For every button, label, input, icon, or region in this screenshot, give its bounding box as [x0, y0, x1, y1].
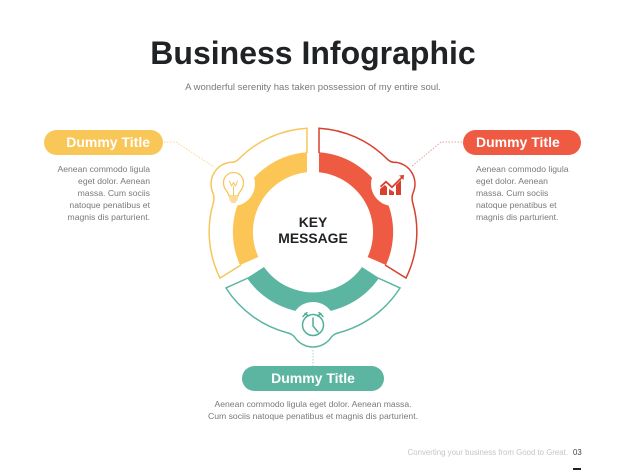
footer: Converting your business from Good to Great. — [408, 448, 568, 457]
yellow notch — [211, 162, 255, 206]
green notch — [291, 302, 335, 346]
footer: 03 — [573, 448, 582, 457]
panel: right callout — [463, 130, 581, 222]
connector: red — [411, 142, 462, 167]
footer — [408, 448, 582, 470]
title: Business Infographic — [150, 35, 476, 71]
right text block: eget dolor. Aenean — [476, 176, 548, 186]
yellow outline — [209, 128, 307, 278]
right text block: massa. Cum sociis — [476, 188, 548, 198]
bottom text block — [208, 399, 418, 421]
left pill heading: Dummy Title — [66, 134, 150, 150]
center message: KEY — [299, 214, 328, 230]
panel: red segment — [319, 128, 417, 278]
connector: green — [312, 347, 314, 366]
bottom text block: Aenean commodo ligula eget dolor. Aenean massa. — [214, 399, 412, 409]
left text block: Aenean commodo ligula — [57, 164, 150, 174]
yellow ring — [233, 152, 307, 265]
subtitle: A wonderful serenity has taken possession of my entire soul. — [185, 82, 441, 93]
bottom pill heading — [242, 366, 384, 391]
right text block: natoque penatibus et — [476, 200, 557, 210]
right text block — [476, 164, 569, 222]
left text block: natoque penatibus et — [69, 200, 151, 210]
green outline — [226, 278, 400, 347]
panel: yellow segment — [209, 128, 307, 278]
bottom text block: Cum sociis natoque penatibus et magnis dis parturient. — [208, 411, 418, 421]
center message: MESSAGE — [278, 230, 348, 246]
green ring — [247, 267, 379, 313]
icon: growth chart — [380, 175, 404, 195]
left text block — [57, 164, 151, 222]
panel: left callout — [44, 130, 163, 222]
left text block: magnis dis parturient. — [68, 212, 150, 222]
panel: bottom callout — [208, 366, 418, 421]
icon: light bulb — [224, 172, 244, 202]
panel: green segment — [226, 267, 400, 347]
connector: yellow — [164, 142, 214, 167]
center message — [278, 214, 348, 246]
red ring — [319, 152, 393, 265]
left text block: eget dolor. Aenean — [78, 176, 150, 186]
right text block: Aenean commodo ligula — [476, 164, 569, 174]
icon: alarm clock — [302, 312, 324, 336]
right text block: magnis dis parturient. — [476, 212, 558, 222]
red notch — [371, 162, 415, 206]
right pill heading: Dummy Title — [476, 134, 560, 150]
red outline — [319, 128, 417, 278]
bottom pill heading: Dummy Title — [271, 370, 355, 386]
left text block: massa. Cum sociis — [78, 188, 150, 198]
